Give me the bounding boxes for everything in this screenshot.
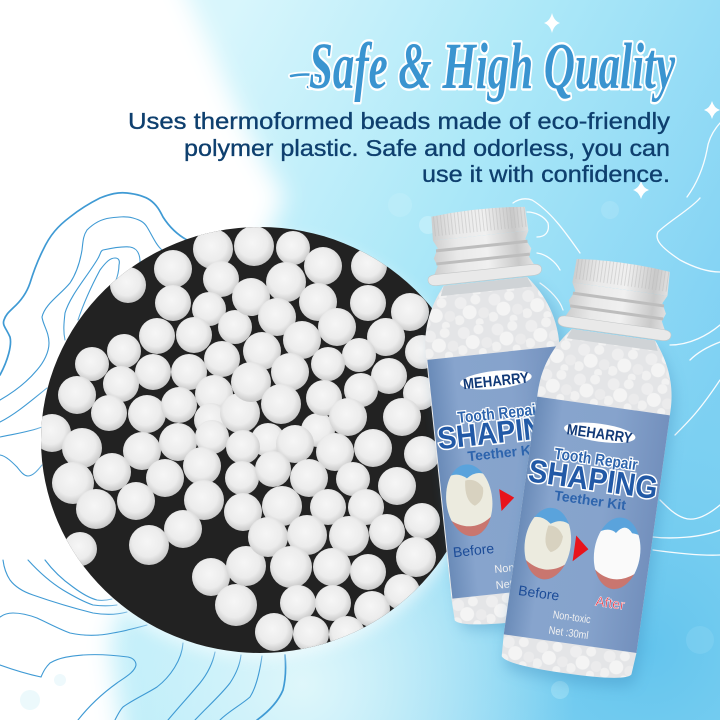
- before and after captions: Before: [517, 582, 561, 604]
- label: Net :30ml: [495, 575, 543, 592]
- cap: [421, 203, 542, 286]
- white contour lines, right: [513, 123, 720, 555]
- net content: Net :30ml: [548, 625, 589, 642]
- brand logo: MEHARRY: [566, 421, 633, 447]
- before and after captions: After: [594, 593, 626, 613]
- label: Teether Kit: [467, 441, 540, 464]
- product name: SHAPING: [526, 452, 660, 506]
- icon: tooth before: [524, 508, 572, 580]
- bottle: front (right): [502, 258, 680, 689]
- blue contour lines, left: [0, 193, 286, 720]
- bottle: back (left): [424, 206, 568, 635]
- body text: polymer plastic. Safe and odorless, you can: [184, 135, 670, 161]
- sparkle icons: [544, 13, 720, 199]
- body text: Uses thermoformed beads made of eco-friendly: [128, 108, 671, 134]
- label: [427, 346, 556, 599]
- body text: use it with confidence.: [422, 161, 670, 187]
- net content: Non-toxic: [552, 609, 592, 626]
- product name: Teether Kit: [554, 487, 627, 513]
- product name: Tooth Repair: [553, 446, 639, 474]
- icon: tooth after: [594, 518, 640, 590]
- product name: [525, 443, 661, 517]
- before and after captions: [517, 582, 626, 613]
- label: SHAPING: [436, 408, 567, 456]
- label: [504, 397, 670, 653]
- circular photo of white beads: [33, 226, 481, 659]
- arrow: [573, 535, 590, 563]
- body text: [128, 108, 671, 187]
- cap: [557, 255, 680, 342]
- label: Tooth Repair: [457, 401, 542, 427]
- net content: [548, 609, 592, 642]
- label: Non-toxic: [494, 559, 542, 576]
- label: MEHARRY: [462, 369, 530, 393]
- label: Before: [452, 540, 495, 560]
